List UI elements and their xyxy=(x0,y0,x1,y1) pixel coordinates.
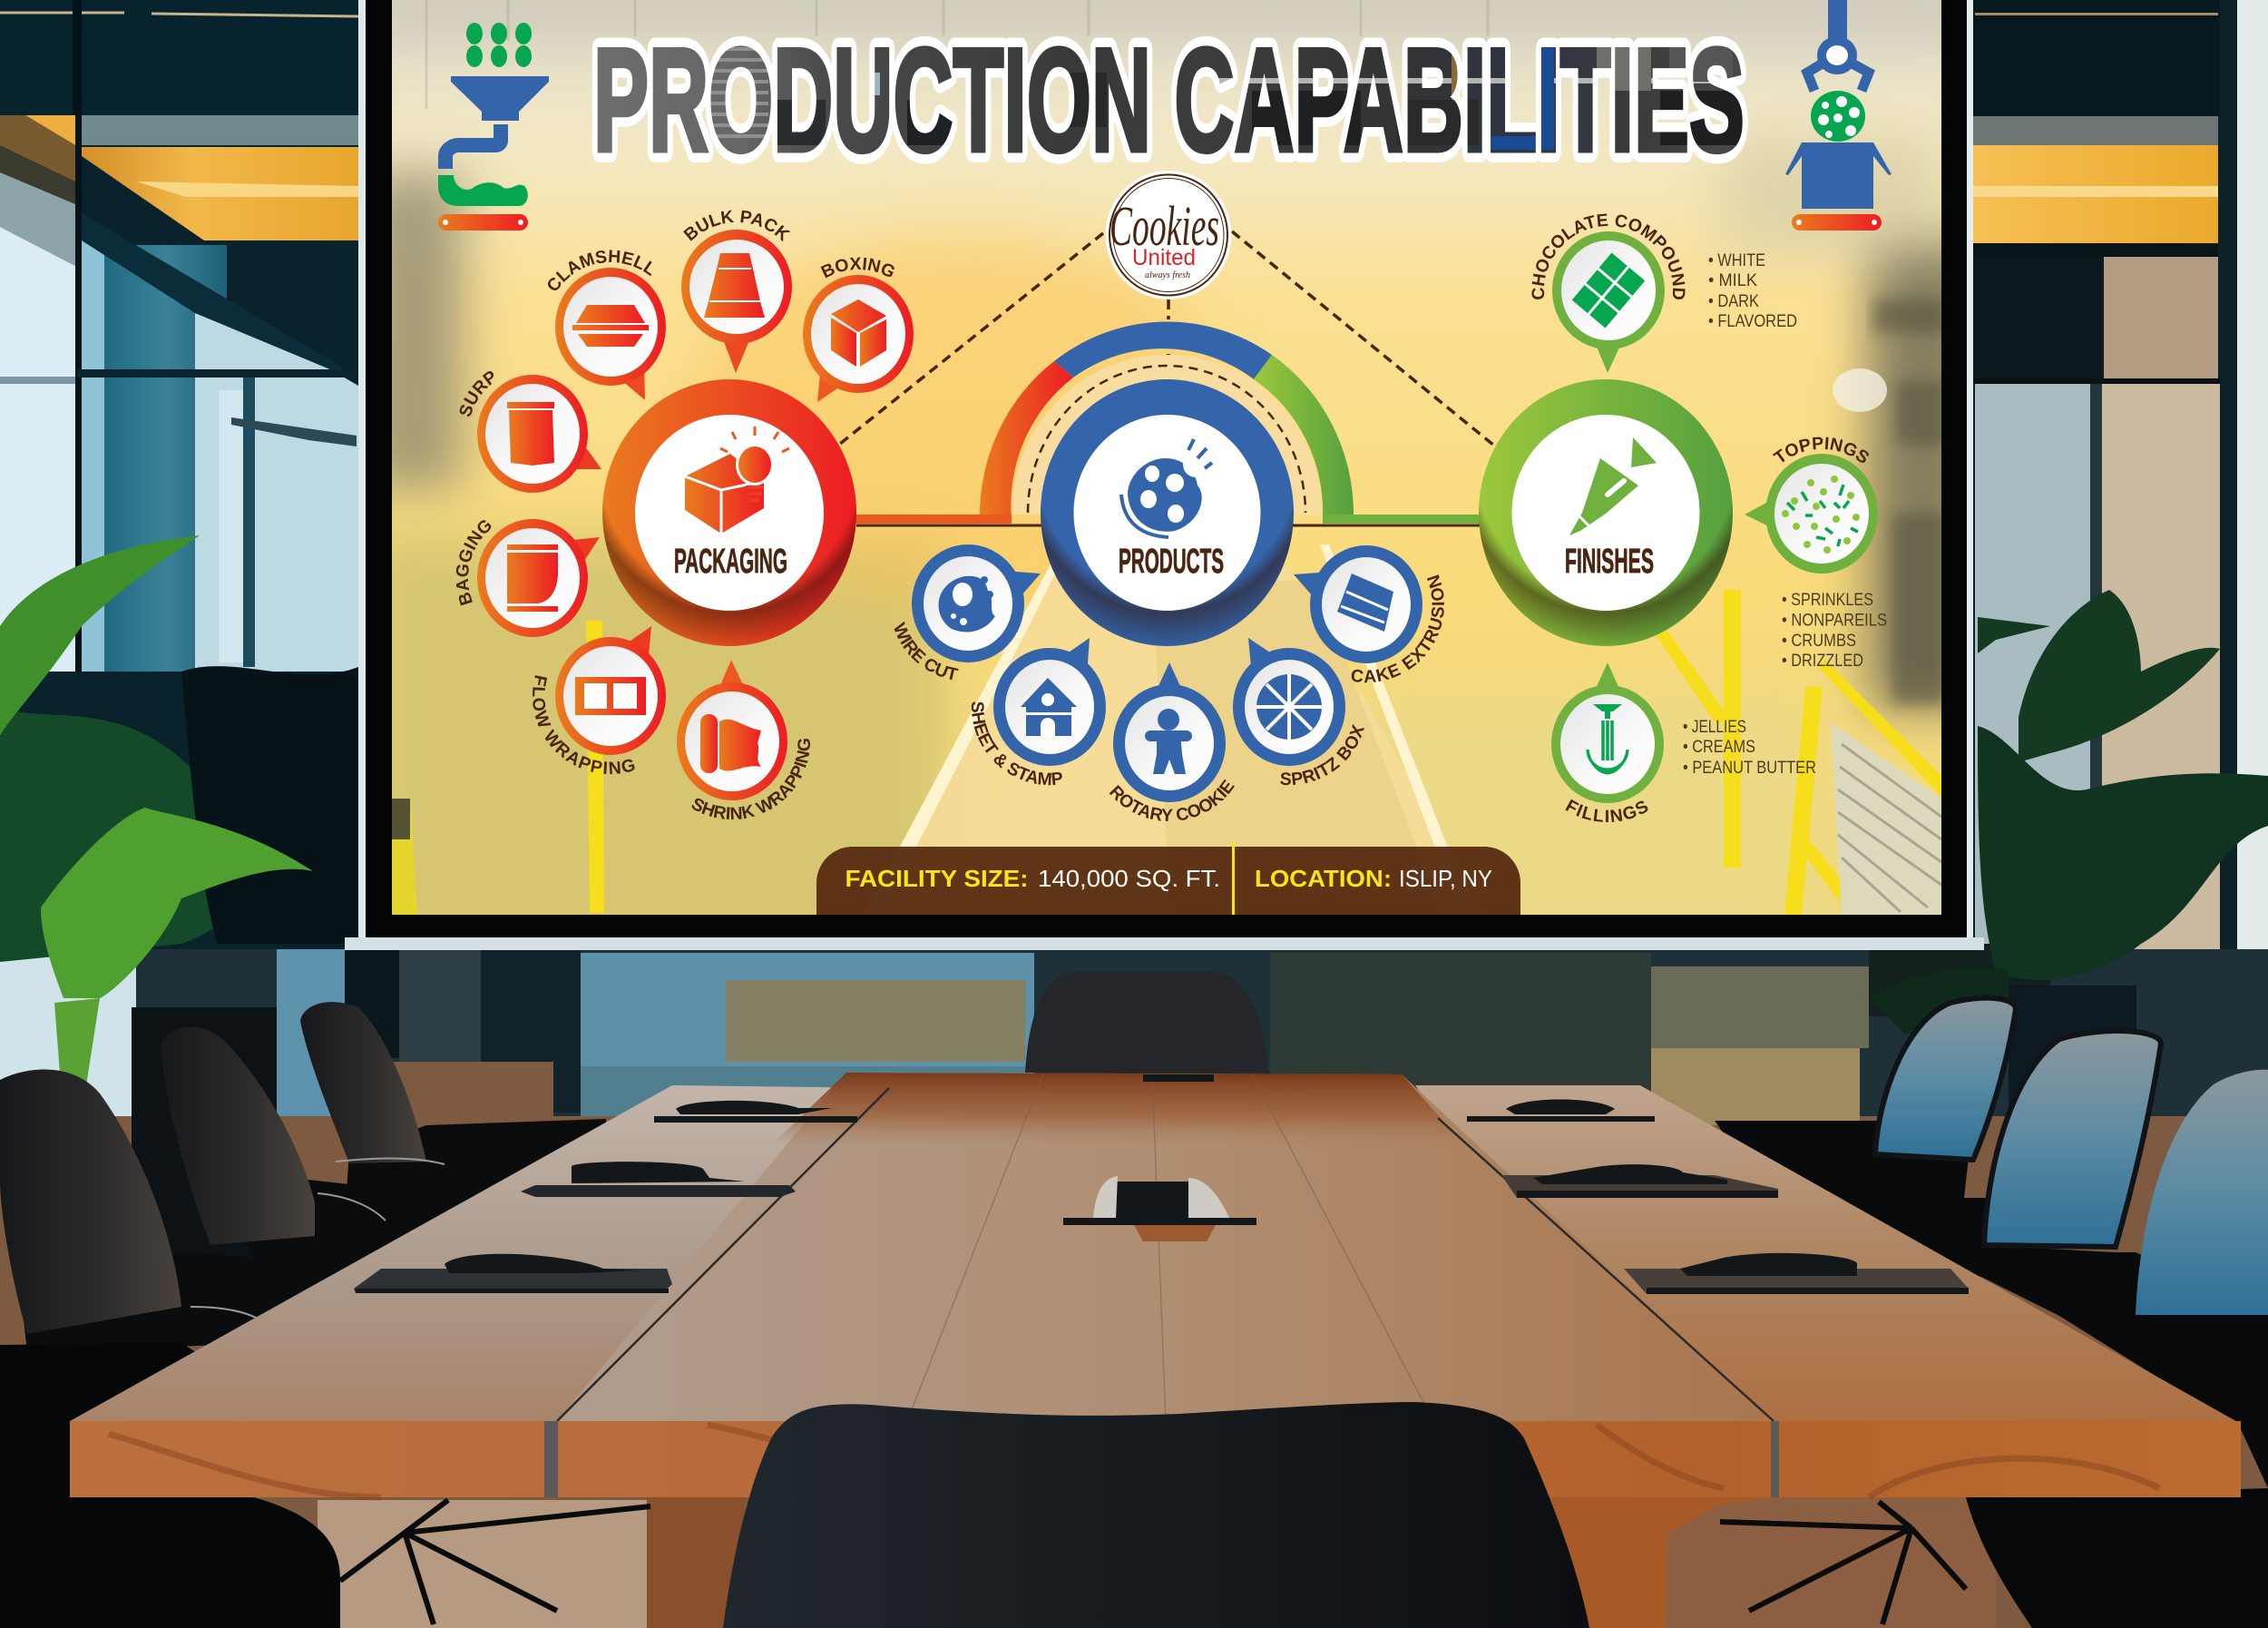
icon: box and light bulb xyxy=(685,427,789,534)
screen bottom bar xyxy=(345,937,1984,950)
text: facility size: FACILITY SIZE: xyxy=(846,865,1029,892)
icon: robot claw and box xyxy=(1785,0,1892,230)
slide photographic backdrop xyxy=(363,0,1978,953)
right wall: ceiling and windows xyxy=(1973,0,2268,1128)
icon: filling nozzle xyxy=(1588,704,1628,773)
panel: products hub xyxy=(1041,379,1294,646)
connector: dark baseline xyxy=(856,525,1481,526)
label: shrink wrapping: SHRINK WRAPPING xyxy=(691,739,810,820)
label: chocolate compound: CHOCOLATE COMPOUND xyxy=(1529,211,1688,300)
back glass wall below the screen xyxy=(0,949,2268,1158)
list: topping types xyxy=(1782,591,1887,671)
text: location value: ISLIP, NY xyxy=(1399,865,1492,892)
infographic slide xyxy=(392,0,1941,915)
panel: packaging hub xyxy=(602,379,856,646)
bubble: cake extrusion xyxy=(1294,545,1477,713)
label: rotary cookie: ROTARY COOKIE xyxy=(1109,779,1235,821)
screen white side rail: left xyxy=(358,0,366,938)
chairs: left row xyxy=(0,1002,606,1628)
bubble: clamshell xyxy=(538,238,666,400)
icon: sprinkles xyxy=(1782,476,1860,554)
label: sheet and stamp: SHEET & STAMP xyxy=(971,701,1062,786)
bubble: wire cut xyxy=(881,544,1041,694)
dashed connectors from logo xyxy=(840,231,1494,446)
label: finishes: FINISHES xyxy=(1565,543,1654,581)
screen white side rail: right xyxy=(1967,0,1973,938)
list: filling types: • JELLIES xyxy=(1683,718,1746,737)
list: chocolate types: • DARK xyxy=(1708,292,1759,311)
icon: stand-up pouch xyxy=(507,402,554,466)
label: products: PRODUCTS xyxy=(1119,543,1224,581)
label: bagging: BAGGING xyxy=(455,520,492,606)
list: filling types xyxy=(1683,718,1816,778)
plant: right xyxy=(1869,590,2268,1131)
icon: chocolate bar xyxy=(1572,253,1645,328)
logo: Cookies United: United xyxy=(1132,245,1196,270)
icon: clamshell container xyxy=(572,305,649,347)
arch around products xyxy=(980,322,1354,519)
text: facility size value: 140,000 SQ. FT. xyxy=(1038,865,1220,892)
icon: layered cake xyxy=(1337,574,1393,632)
label: boxing: BOXING xyxy=(820,258,894,278)
connector: packaging to products xyxy=(853,515,1012,524)
label: toppings: TOPPINGS xyxy=(1771,434,1872,468)
bubble: chocolate compound xyxy=(1529,211,1688,373)
label: fillings: FILLINGS xyxy=(1562,796,1653,827)
left wall: ceiling and windows xyxy=(0,0,363,672)
plant: left xyxy=(0,535,358,1280)
bubble: sheet and stamp xyxy=(946,638,1106,812)
arch dashed inner line xyxy=(1028,366,1305,513)
icon: hopper funnel machine xyxy=(438,23,549,230)
bubble: toppings xyxy=(1745,434,1878,574)
connector: products to finishes xyxy=(1323,515,1482,524)
arch: green segment xyxy=(1254,355,1354,519)
icon: gingerbread man xyxy=(1145,709,1192,774)
chair bases xyxy=(340,1500,1966,1624)
label: cake extrusion: CAKE EXTRUSION xyxy=(1352,574,1444,682)
icon: shrink film roll xyxy=(700,714,761,773)
bubble: shrink wrapping xyxy=(677,660,837,849)
info bar: facility size and location xyxy=(816,842,1520,915)
label: flow wrapping: FLOW WRAPPING xyxy=(532,675,635,775)
chair: front centre xyxy=(723,1402,1589,1628)
bubble: surp xyxy=(451,364,601,493)
label: packaging: PACKAGING xyxy=(674,543,787,581)
label: wire cut: WIRE CUT xyxy=(894,621,958,681)
label: clamshell: CLAMSHELL xyxy=(548,250,652,290)
bubble: spritz box xyxy=(1233,638,1380,806)
icon: bulk pack tray xyxy=(704,253,765,318)
text: location: LOCATION: xyxy=(1255,865,1392,892)
arch: blue segment xyxy=(1054,322,1272,379)
label: bulk pack: BULK PACK xyxy=(683,211,791,241)
panel: finishes hub xyxy=(1479,379,1733,646)
label: surp: SURP xyxy=(459,371,494,417)
icon: bitten cookie xyxy=(1121,439,1212,537)
arch beige inner band xyxy=(1012,355,1322,515)
icon: gingerbread house xyxy=(1021,678,1077,736)
icon: bag xyxy=(507,544,558,612)
label: spritz box: SPRITZ BOX xyxy=(1280,724,1364,786)
list: topping types: • NONPAREILS xyxy=(1782,612,1887,630)
logo: Cookies United xyxy=(1105,171,1232,299)
list: chocolate types: • FLAVORED xyxy=(1708,312,1797,331)
list: chocolate types: • MILK xyxy=(1708,271,1757,290)
screen black frame xyxy=(366,0,1967,937)
bubble: rotary cookie xyxy=(1105,662,1240,829)
logo: Cookies United: Cookies xyxy=(1110,196,1219,258)
conference table xyxy=(70,1073,2241,1628)
bubble: bagging xyxy=(443,511,600,637)
icon: cardboard box xyxy=(831,299,886,367)
list: topping types: • DRIZZLED xyxy=(1782,652,1863,671)
list: chocolate types xyxy=(1708,251,1797,331)
projection screen xyxy=(345,0,1984,950)
list: topping types: • SPRINKLES xyxy=(1782,591,1873,610)
bubble: fillings xyxy=(1551,662,1664,827)
bubble: boxing xyxy=(803,254,914,402)
chairs: right row xyxy=(1715,998,2268,1628)
title xyxy=(591,36,1748,164)
icon: wire cut cookie xyxy=(939,576,995,633)
wooden floor xyxy=(0,944,2268,1628)
bubble: flow wrapping xyxy=(500,626,666,807)
icon: piping bag xyxy=(1569,437,1657,535)
arch: orange segment xyxy=(980,361,1073,519)
bubble: bulk pack xyxy=(680,207,793,373)
list: chocolate types: • WHITE xyxy=(1708,251,1765,270)
list: topping types: • CRUMBS xyxy=(1782,632,1856,651)
list: filling types: • CREAMS xyxy=(1683,738,1755,757)
list: filling types: • PEANUT BUTTER xyxy=(1683,759,1816,778)
icon: spritz wheel xyxy=(1256,674,1322,740)
logo: Cookies United: always fresh xyxy=(1145,270,1190,280)
chair: far centre xyxy=(1025,972,1268,1073)
table place mats and items xyxy=(354,1074,1969,1294)
icon: flow wrap pack xyxy=(575,677,646,715)
